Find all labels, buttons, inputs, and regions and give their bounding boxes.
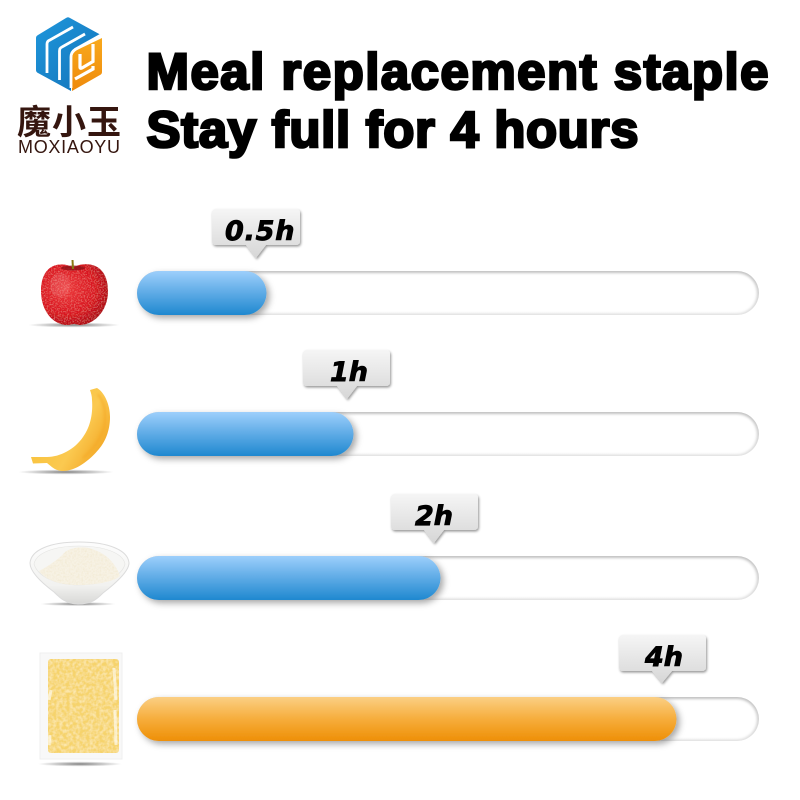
logo cube icon: [36, 17, 102, 91]
logo chinese name: 魔小玉: [17, 104, 121, 142]
callout: 1h: [330, 357, 368, 388]
progress track: [137, 697, 759, 741]
callout: [619, 635, 706, 683]
icon: noodle pack: [38, 653, 122, 766]
progress fill: [137, 556, 440, 600]
title line 1: Meal replacement staple: [146, 43, 768, 100]
progress fill: [137, 697, 676, 741]
callout: 2h: [415, 501, 453, 532]
row: apple 0.5h: [28, 209, 759, 328]
callout: 0.5h: [225, 216, 295, 247]
progress track: [137, 556, 759, 600]
callout: [391, 494, 478, 543]
logo: [17, 17, 121, 157]
logo latin name: MOXIAOYU: [18, 137, 120, 157]
progress track: [137, 271, 759, 315]
callout: 4h: [644, 642, 683, 673]
callout: [303, 350, 390, 399]
icon: rice bowl: [30, 542, 129, 606]
icon: apple: [28, 260, 120, 328]
progress track: [137, 412, 759, 456]
row: noodle pack 4h: [38, 635, 759, 766]
row: banana 1h: [18, 350, 759, 474]
icon: banana: [18, 388, 114, 474]
title line 2: Stay full for 4 hours: [146, 101, 638, 158]
progress fill: [137, 271, 266, 315]
title: [146, 43, 768, 158]
row: rice bowl 2h: [30, 494, 759, 606]
progress fill: [137, 412, 354, 456]
callout: [212, 209, 300, 258]
